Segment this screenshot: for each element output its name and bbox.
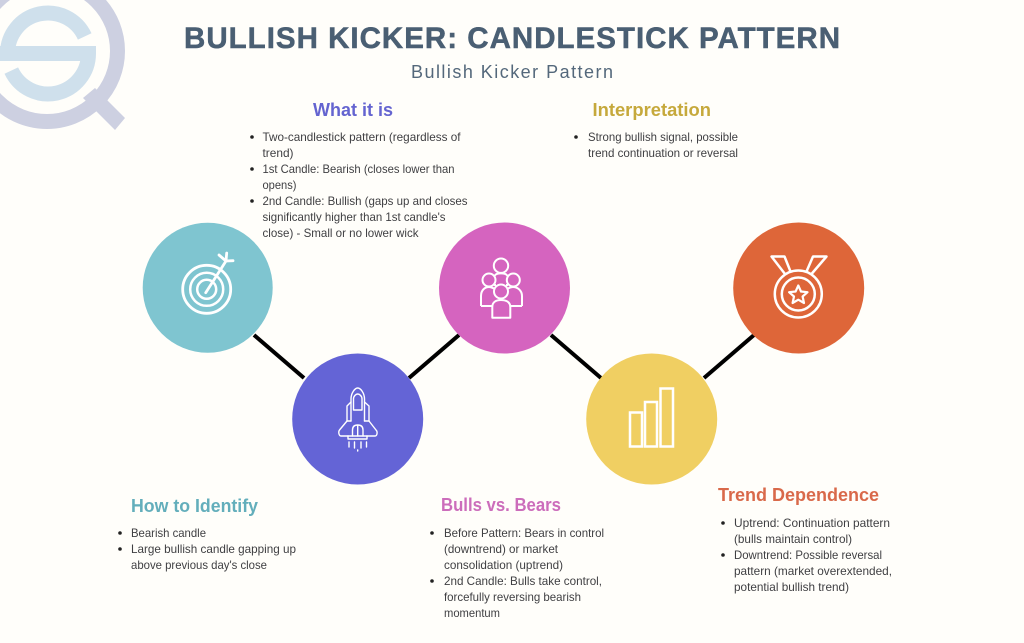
icon: medal [772, 256, 826, 318]
bullet list: what it is [250, 130, 468, 240]
bullet list: bulls vs bears: momentum [444, 606, 500, 620]
node: rocket [292, 354, 423, 484]
icon: people [481, 258, 522, 318]
bullet list: interpretation: trend continuation or reversal [588, 146, 738, 160]
bullet list: interpretation: Strong bullish signal, possible [588, 130, 738, 144]
heading: how to identify: How to Identify [131, 496, 258, 516]
bullet list: trend dependence [721, 516, 892, 594]
connector lines [254, 335, 754, 378]
bullet list: what it is: opens) [262, 178, 296, 192]
panel: interpretation [574, 100, 738, 160]
node: target [143, 223, 273, 353]
bullet list: how to identify: above previous day's close [131, 558, 267, 572]
bullet list: bulls vs bears: 2nd Candle: Bulls take control, [444, 574, 602, 588]
bullet list: bulls vs bears: forcefully reversing bearish [444, 590, 581, 604]
bullet list: interpretation [574, 130, 738, 160]
bullet list: what it is: 2nd Candle: Bullish (gaps up and closes [262, 194, 468, 208]
node: medal [733, 222, 864, 354]
bullet list: how to identify: Bearish candle [131, 526, 206, 540]
bullet list: what it is: Two-candlestick pattern (regardless of [262, 130, 461, 144]
panel: bulls vs bears [430, 495, 604, 620]
panel: what it is [250, 100, 468, 240]
title: BULLISH KICKER: CANDLESTICK PATTERN [184, 22, 840, 55]
bullet list: bulls vs bears: (downtrend) or market [444, 542, 559, 556]
panel: how to identify [118, 496, 296, 572]
node: bar chart [586, 354, 717, 484]
heading: what it is: What it is [313, 100, 393, 120]
bullet list: trend dependence: Uptrend: Continuation pattern [734, 516, 890, 530]
logo watermark [0, 0, 125, 130]
icon: bar chart [630, 388, 673, 446]
bullet list: what it is: 1st Candle: Bearish (closes lower than [262, 162, 454, 176]
bullet list: bulls vs bears: consolidation (uptrend) [444, 558, 563, 572]
bullet list: trend dependence: potential bullish trend) [734, 580, 849, 594]
bullet list: trend dependence: Downtrend: Possible reversal [734, 548, 882, 562]
bullet list: how to identify: Large bullish candle gapping up [131, 542, 296, 556]
heading: interpretation: Interpretation [592, 100, 711, 120]
heading: bulls vs bears: Bulls vs. Bears [441, 495, 561, 515]
bullet list: bulls vs bears: Before Pattern: Bears in control [444, 526, 604, 540]
panel: trend dependence [718, 485, 892, 594]
icon: rocket [339, 388, 377, 451]
bullet list: trend dependence: (bulls maintain control) [734, 532, 852, 546]
icon: target [183, 253, 233, 313]
node: people [439, 222, 570, 354]
subtitle: Bullish Kicker Pattern [411, 62, 613, 82]
bullet list: trend dependence: pattern (market overextended, [734, 564, 892, 578]
bullet list: bulls vs bears [430, 526, 604, 620]
bullet list: how to identify [118, 526, 296, 572]
heading: trend dependence: Trend Dependence [718, 485, 879, 505]
bullet list: what it is: close) - Small or no lower wick [262, 226, 419, 240]
bullet list: what it is: significantly higher than 1st candle's [262, 210, 446, 224]
bullet list: what it is: trend) [262, 146, 294, 160]
